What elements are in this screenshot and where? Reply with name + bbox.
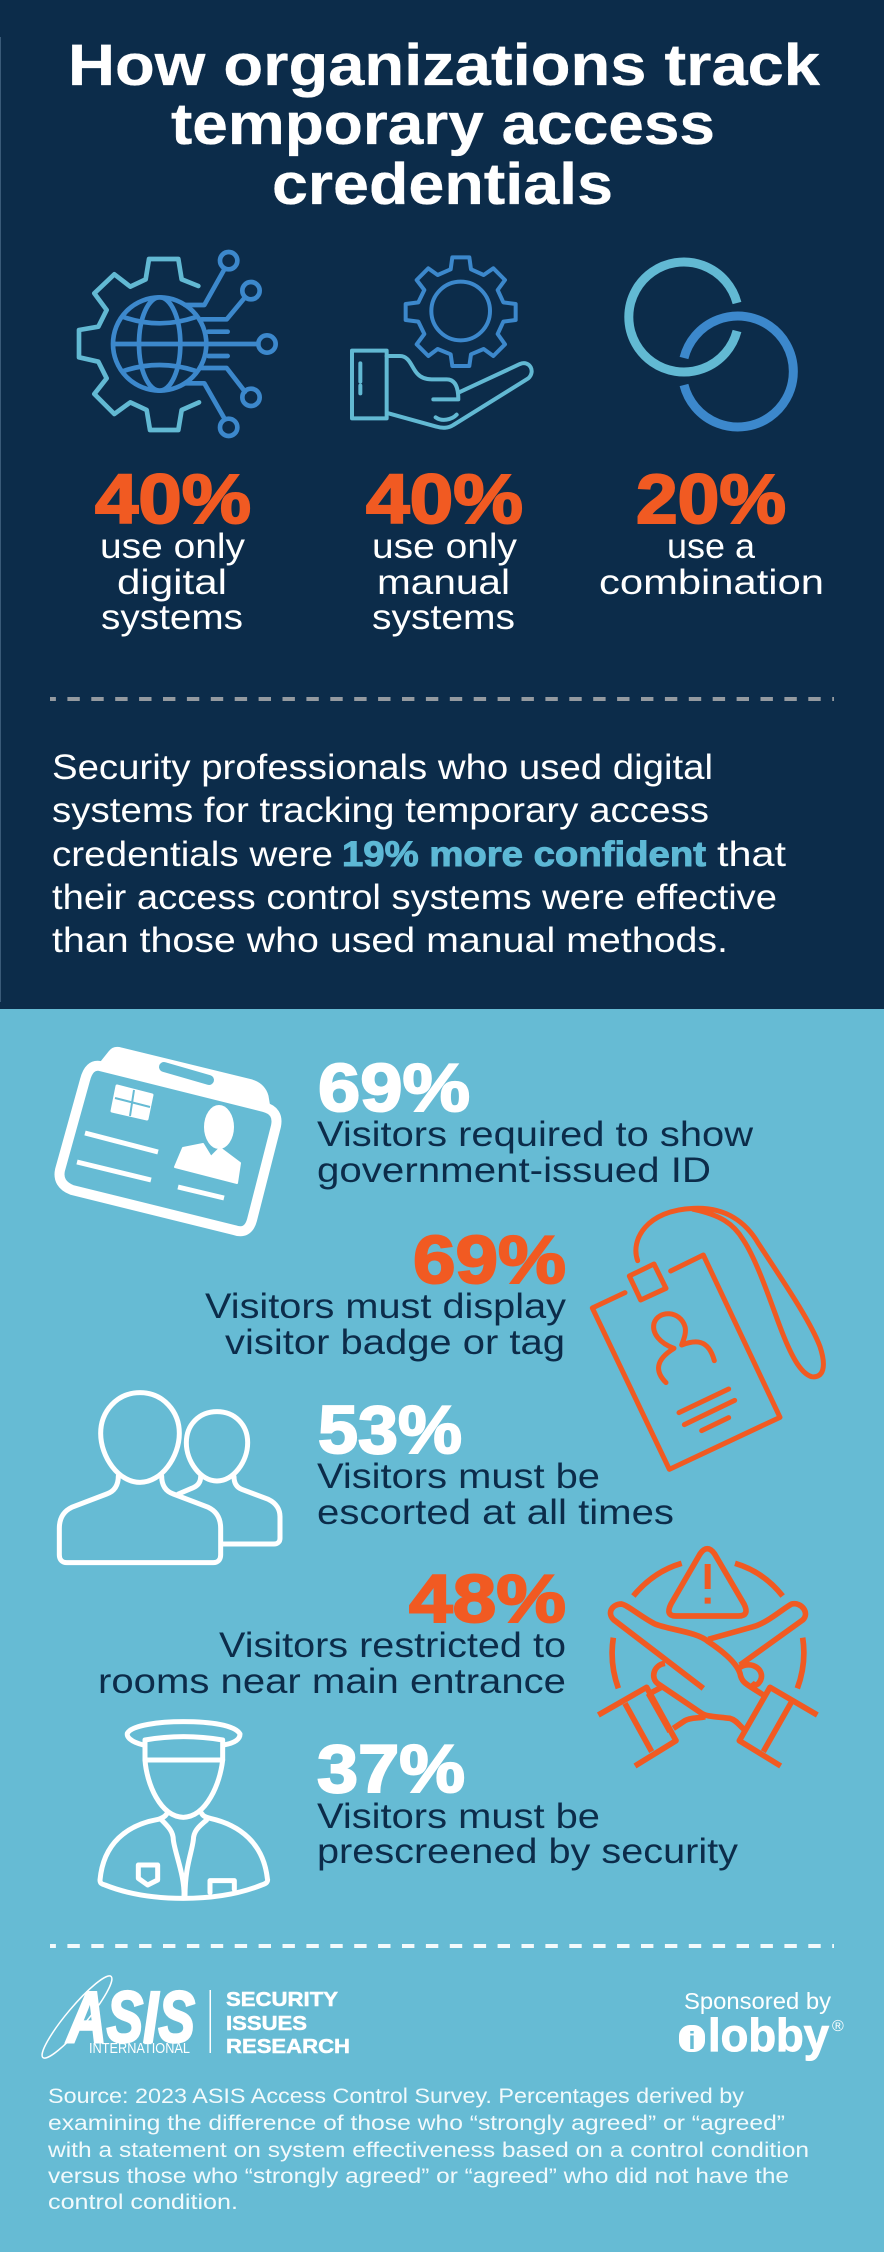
- logo: ASIS International: ISSUES: [226, 2013, 307, 2035]
- stat: 53% escorted: escorted at all times: [317, 1493, 674, 1532]
- text block: source note: with a statement on system effectiveness based on a control condition: [47, 2139, 809, 2162]
- logo: sponsored by iLobby: Sponsored by: [684, 1988, 832, 2014]
- text block: source note: versus those who “strongly agreed” or “agreed” who did not have the: [48, 2165, 789, 2188]
- stat: 40% digital: 40%: [95, 460, 251, 538]
- stat: 69% visitor badge: 69%: [413, 1222, 566, 1298]
- logo: sponsored by iLobby: [679, 1988, 844, 2061]
- icon: crossed hands with warning triangle: [598, 1549, 817, 1766]
- stat: 69% government ID: Visitors required to show: [317, 1115, 754, 1154]
- stat: 40% manual: [366, 460, 523, 637]
- text block: source note: examining the difference of those who “strongly agreed” or “agreed”: [48, 2112, 785, 2135]
- stat: 40% manual: 40%: [366, 460, 523, 538]
- text block: confidence finding: credentials were: [52, 835, 333, 874]
- logo: ASIS International: SECURITY: [226, 1989, 339, 2011]
- stat: 48% restricted rooms: rooms near main entrance: [98, 1662, 566, 1701]
- text block: confidence finding: Security professionals who used digital: [52, 748, 713, 787]
- text block: source note: control condition.: [48, 2191, 238, 2214]
- stat: 37% prescreened: [317, 1731, 739, 1871]
- stat: 20% combination: 20%: [636, 460, 786, 538]
- stat: 20% combination: combination: [599, 563, 824, 602]
- text block: confidence finding: [52, 748, 786, 960]
- stat: 53% escorted: Visitors must be: [317, 1457, 600, 1496]
- icon: two people outline: [59, 1393, 280, 1563]
- stat: 48% restricted rooms: [98, 1561, 566, 1701]
- stat: 69% visitor badge: visitor badge or tag: [225, 1323, 565, 1362]
- stat: 20% combination: use a: [667, 527, 756, 566]
- stat: 40% digital: [95, 460, 251, 637]
- icon: gear with globe and circuits: [79, 252, 276, 436]
- icon: ID card: [60, 1048, 276, 1231]
- stat: 37% prescreened: 37%: [317, 1731, 465, 1807]
- title: credentials: [272, 152, 613, 217]
- stat: 40% digital: use only: [100, 527, 246, 566]
- stat: 20% combination: [599, 460, 824, 602]
- stat: 40% digital: digital: [117, 563, 227, 602]
- icon: hand holding gear: [352, 257, 532, 428]
- logo: ASIS International: RESEARCH: [226, 2036, 350, 2058]
- stat: 40% manual: use only: [372, 527, 518, 566]
- stat: 40% manual: systems: [372, 598, 515, 637]
- icon: visitor badge on lanyard: [592, 1208, 823, 1469]
- stat: 48% restricted rooms: 48%: [409, 1561, 566, 1637]
- logo: ASIS International: INTERNATIONAL: [89, 2040, 190, 2057]
- stat: 48% restricted rooms: Visitors restricted to: [219, 1626, 566, 1665]
- panel: dark upper section: [0, 0, 884, 1009]
- icon: security officer: [100, 1722, 268, 1898]
- logo: ASIS International: ASIS: [65, 1978, 195, 2058]
- stat: 69% government ID: government-issued ID: [317, 1151, 711, 1190]
- stat: 53% escorted: [317, 1392, 674, 1532]
- title: temporary access: [171, 92, 715, 157]
- stat: 40% manual: manual: [377, 563, 510, 602]
- stat: 69% government ID: [317, 1050, 754, 1190]
- stat: 53% escorted: 53%: [318, 1392, 462, 1468]
- title: [68, 33, 821, 217]
- stat: 37% prescreened: Visitors must be: [317, 1797, 600, 1836]
- text block: confidence finding: systems for tracking temporary access: [52, 791, 709, 830]
- logo: sponsored by iLobby: i: [689, 2027, 695, 2055]
- stat: 40% digital: systems: [101, 598, 243, 637]
- stat: 37% prescreened: prescreened by security: [317, 1832, 739, 1871]
- logo: sponsored by iLobby: lobby: [708, 2009, 829, 2061]
- text block: confidence finding: than those who used manual methods.: [52, 921, 728, 960]
- panel: light lower background: [0, 1009, 884, 2252]
- stat: 69% visitor badge: Visitors must display: [205, 1287, 567, 1326]
- text block: confidence finding: 19% more confident: [342, 835, 706, 874]
- stat: 69% visitor badge: [205, 1222, 567, 1362]
- logo: sponsored by iLobby: ®: [832, 2018, 844, 2035]
- text block: confidence finding: that: [717, 835, 786, 874]
- logo: ASIS International: [35, 1970, 350, 2064]
- title: How organizations track: [68, 33, 821, 98]
- stat: 69% government ID: 69%: [318, 1050, 470, 1126]
- text block: source note: [47, 2085, 809, 2214]
- text block: source note: Source: 2023 ASIS Access Control Survey. Percentages derived by: [48, 2085, 745, 2108]
- text block: confidence finding: their access control systems were effective: [52, 878, 777, 917]
- icon: interlocked chain rings: [629, 262, 793, 427]
